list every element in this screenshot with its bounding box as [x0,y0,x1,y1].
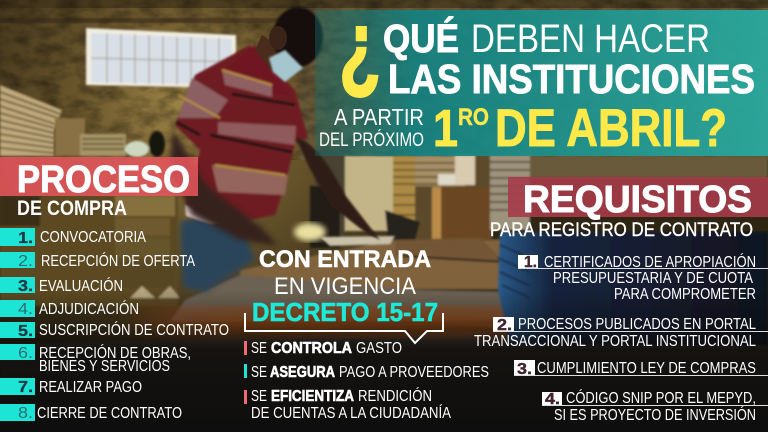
bottom darkening [0,290,768,432]
panel: decreto 15-17 [244,246,489,422]
step 5 [0,322,229,340]
jeans [180,206,255,292]
step 8: CIERRE DE CONTRATO [37,405,182,422]
step 1 [0,228,147,247]
step 2: 2. [18,253,33,270]
bullet: eficientiza rendicion [244,386,451,422]
step 4: 4. [18,301,33,318]
heading: con entrada en vigencia [259,246,431,300]
step 3 [0,277,123,295]
step 7 [0,378,142,396]
step 4: ADJUDICACIÓN [39,301,139,318]
requirement 1: 1. [524,254,537,271]
mask [269,50,303,82]
panel: proceso de compra [0,157,229,422]
bullet: controla gasto: CONTROLA [271,340,352,357]
paper stack left [0,85,62,156]
step 8 [0,404,182,422]
title line 1: QUÉ [383,16,459,61]
step 1: CONVOCATORIA [40,229,147,246]
heading banner: proceso: PROCESO [17,159,190,201]
right wall, paper stacks and box [310,150,768,248]
man [170,7,380,292]
step 6: 6. [18,345,33,362]
bullet: eficientiza rendicion: SE [251,388,267,405]
bullet: eficientiza rendicion: EFICIENTIZA [271,388,354,405]
bullet: controla gasto: GASTO [356,340,402,357]
title line 1: DEBEN HACER [471,17,710,61]
step 3: EVALUACIÓN [39,278,123,295]
step 6 [0,344,191,375]
subheading: de compra: DE COMPRA [17,197,127,220]
arm left [170,128,278,246]
step 5: SUSCRIPCIÓN DE CONTRATO [39,322,229,339]
requirement 2 [474,316,768,350]
title line 3: DEL PRÓXIMO [319,129,424,151]
requirement 1 [518,252,768,303]
step 7: 7. [18,379,33,396]
requirement 4 [542,388,768,424]
step 7: REALIZAR PAGO [39,379,142,396]
heading: con entrada en vigencia: CON ENTRADA [259,246,431,273]
step 6: RECEPCIÓN DE OBRAS, [39,345,191,362]
title line 1 [383,16,710,61]
title line 3: DE ABRIL? [495,99,727,158]
step 4 [0,300,139,318]
bullet: asegura pago: PAGO A PROVEEDORES [339,364,489,381]
bullet: controla gasto: SE [251,340,267,357]
callout bracket [245,313,443,343]
arm right [296,138,380,240]
boxes and objects on shelf [0,118,180,306]
step 1: 1. [18,230,33,247]
bullet: asegura pago: SE [251,364,267,381]
requirement 4: 4. [545,391,560,408]
title banner [315,0,768,158]
bullet: eficientiza rendicion: RENDICIÓN [358,386,432,405]
bullet: asegura pago [244,364,489,381]
blue paper stack [498,232,768,345]
heading: decreto: DECRETO 15-17 [252,299,438,327]
bullet: eficientiza rendicion: DE CUENTAS A LA CIUDADANÍA [251,403,451,422]
step 2 [0,252,196,270]
shirt [175,45,308,225]
step 6: BIENES Y SERVICIOS [39,358,170,375]
neck [255,35,285,72]
bullet: asegura pago: ASEGURA [270,364,335,381]
title line 3: RO [458,104,489,131]
requirement 2: 2. [497,317,512,334]
step 3: 3. [18,278,33,295]
heading banner: requisitos: REQUISITOS [523,179,752,221]
heading: con entrada en vigencia: EN VIGENCIA [274,273,416,300]
step 8: 8. [18,405,33,422]
title line 3: 1 [433,100,458,158]
panel: requisitos [474,177,768,424]
bullet: controla gasto [244,340,402,357]
step 2: RECEPCIÓN DE OFERTA [41,253,196,270]
head [273,7,323,67]
window [86,28,236,88]
title line 3: A PARTIR [334,104,424,130]
title line 3 [319,99,727,158]
requirement 3: 3. [517,361,532,378]
step 5: 5. [18,323,33,340]
worktable [0,236,768,432]
